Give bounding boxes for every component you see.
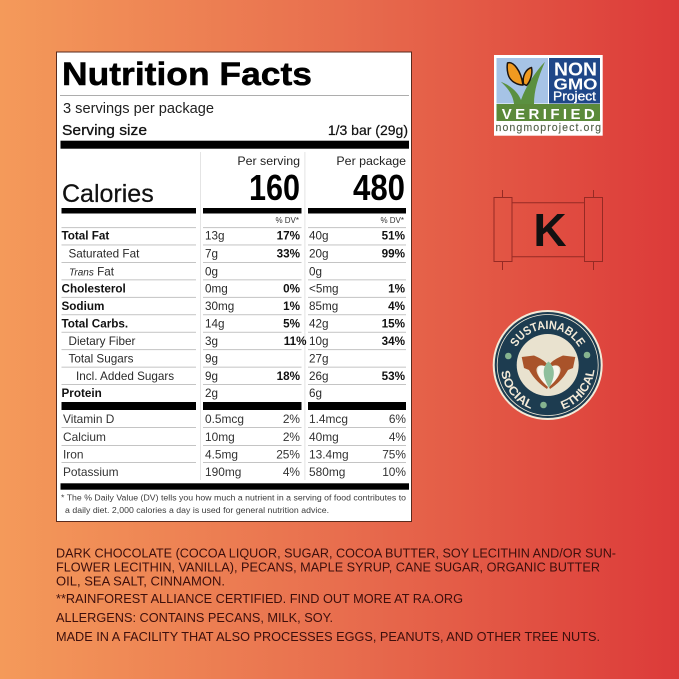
footnote: * The % Daily Value (DV) tells you how much a nutrient in a serving of food contributes to [61,492,406,502]
row: added sugars: 18% [277,370,301,383]
ingredients text [56,546,616,588]
facility note: MADE IN A FACILITY THAT ALSO PROCESSES EGGS, PEANUTS, AND OTHER TREE NUTS. [56,629,600,644]
calories per serving: Per serving [237,154,300,168]
heading: nutrition facts: Nutrition Facts [62,56,312,92]
row: sodium: 4% [388,300,406,313]
row: saturated fat [68,248,406,260]
thick rule above footnote [60,483,409,490]
rainforest alliance note: **RAINFOREST ALLIANCE CERTIFIED. FIND OUT MORE AT RA.ORG [56,591,463,606]
row: dietary fiber: Dietary Fiber [68,335,136,348]
row: sodium: 85mg [309,300,338,313]
row: added sugars: Incl. Added Sugars [76,370,174,383]
icon: kosher k bar [494,190,602,270]
row: potassium: 4% [283,465,300,479]
icon: hands and leaf [522,356,575,389]
row: potassium: 190mg [205,465,241,479]
row: calcium: 40mg [309,430,339,444]
icon: non-gmo project verified badge [494,55,603,136]
row: calcium: 4% [389,430,406,444]
ingredients text: FLOWER LECITHIN, VANILLA), PECANS, MAPLE SYRUP, CANE SUGAR, ORGANIC BUTTER [56,560,600,574]
thick rules under protein [62,402,406,410]
row: total sugars [68,352,329,366]
row: total fat: Total Fat [62,230,109,242]
seal text [502,320,594,410]
seal text: ETHICAL [560,370,594,410]
row: trans fat: Trans Fat [69,266,115,278]
row: potassium: 580mg [309,465,345,479]
serving size row: 1/3 bar (29g) [328,122,408,138]
row: calcium [63,430,406,444]
row: vitamin d [63,412,406,426]
non gmo project wordmark: GMO [554,76,598,94]
row: vitamin d: 6% [389,412,406,426]
row: total fat: 40g [309,230,329,242]
row: added sugars: 9g [205,370,218,383]
row: vitamin d: 1.4mcg [309,412,348,426]
row: protein [62,387,322,400]
row: saturated fat: 7g [205,248,218,260]
row: protein: 2g [205,387,218,400]
row: total fat: 51% [382,230,406,242]
calories per package [336,154,406,208]
row: potassium: Potassium [63,465,119,479]
row: dietary fiber: 10g [309,335,329,348]
footnote: a daily diet. 2,000 calories a day is used for general nutrition advice. [65,505,329,515]
serving size row [62,122,408,139]
row: total sugars: 27g [309,352,329,366]
non gmo project wordmark: NON [554,58,597,80]
row: total carbs: 14g [205,318,225,330]
row: dietary fiber: 3g [205,335,218,348]
row: added sugars: 26g [309,370,329,383]
serving size row: Serving size [62,123,147,139]
row: cholesterol [62,282,406,296]
row: iron: 13.4mg [309,448,349,462]
row: cholesterol: 0% [283,282,301,296]
row: total fat: 17% [277,230,301,242]
row: total carbs: 15% [382,318,406,330]
row: iron: 75% [382,448,406,462]
row: total fat [62,230,406,242]
row: potassium [63,465,406,479]
row: added sugars [76,370,406,383]
seal dots [505,352,590,408]
percent daily value headers: % DV* [275,216,299,225]
icon: grass blades [501,62,545,104]
row: iron: 4.5mg [205,448,238,462]
row: total carbs: 42g [309,318,329,330]
row: total carbs [62,318,406,330]
non gmo project wordmark [553,58,598,104]
calories per serving: 160 [249,167,300,208]
row: trans fat [69,266,322,278]
percent daily value headers: % DV* [380,216,404,225]
row: added sugars: 53% [382,370,406,383]
row: total carbs: 5% [283,318,301,330]
row: sodium [62,300,406,313]
panel: nutrition facts [56,52,412,522]
servings per package: 3 servings per package [63,101,214,117]
row: protein: 6g [309,387,322,400]
row: calcium: 2% [283,430,300,444]
row: sodium: Sodium [62,300,104,313]
row: dietary fiber: 34% [382,335,406,348]
row: cholesterol: Cholesterol [62,282,126,296]
row: trans fat: 0g [309,266,322,278]
icon: kosher k bar: K [533,204,567,256]
calories per package: Per package [336,154,406,168]
row: cholesterol: <5mg [309,282,339,296]
row: total sugars: 9g [205,352,218,366]
row: iron [63,448,406,462]
row: saturated fat: 33% [277,248,301,260]
row: total sugars: Total Sugars [68,352,134,366]
thick rule under serving size [60,141,409,149]
row: dietary fiber: 11% [284,335,307,348]
row: cholesterol: 1% [388,282,406,296]
thick rules under calories [62,208,406,214]
icon: sustainable social ethical seal [492,310,603,420]
row: calcium: 10mg [205,430,235,444]
calories per package: 480 [353,167,405,208]
ingredients text: OIL, SEA SALT, CINNAMON. [56,574,225,588]
non gmo project wordmark: Project [553,90,597,104]
percent daily value headers [275,216,404,225]
allergens note: ALLERGENS: CONTAINS PECANS, MILK, SOY. [56,610,333,625]
seal text: SOCIAL [502,370,532,409]
icon: butterfly [507,63,532,86]
calories per serving [237,154,300,208]
row: trans fat: 0g [205,266,218,278]
row: sodium: 1% [283,300,301,313]
row: total fat: 13g [205,230,225,242]
calories label: Calories [62,180,154,208]
row: saturated fat: 99% [382,248,406,260]
seal text: SUSTAINABLE [510,320,586,347]
row: potassium: 10% [382,465,406,479]
website url: nongmoproject.org [496,122,601,134]
row: vitamin d: 0.5mcg [205,412,244,426]
row: iron: 25% [276,448,300,462]
footnote [61,492,406,515]
row: vitamin d: Vitamin D [63,412,115,426]
row: total carbs: Total Carbs. [62,318,128,330]
row: iron: Iron [63,448,84,462]
row: dietary fiber [68,335,406,348]
row: protein: Protein [62,387,102,400]
row: saturated fat: Saturated Fat [68,248,140,260]
row: sodium: 30mg [205,300,234,313]
row: cholesterol: 0mg [205,282,228,296]
row: saturated fat: 20g [309,248,329,260]
verified label: VERIFIED [502,106,595,123]
row: vitamin d: 2% [283,412,300,426]
ingredients text: DARK CHOCOLATE (COCOA LIQUOR, SUGAR, COCOA BUTTER, SOY LECITHIN AND/OR SUN- [56,546,616,560]
row: calcium: Calcium [63,430,106,444]
